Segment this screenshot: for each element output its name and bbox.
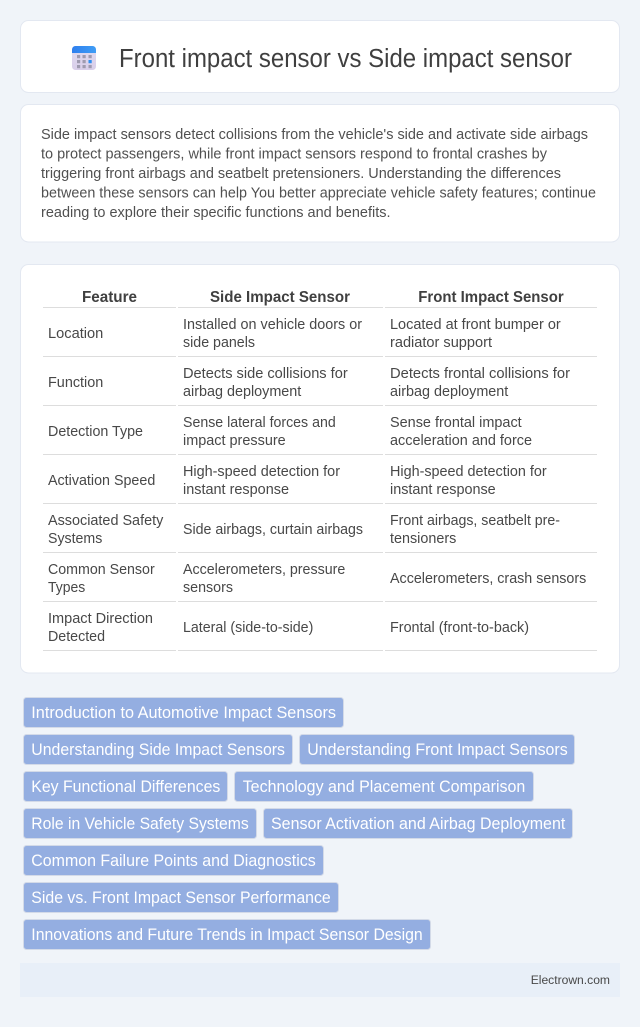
table row: Activation Speed [43, 464, 597, 504]
tag: Side vs. Front [24, 882, 338, 912]
table row: Associated Safety Systems: Associated Safety [48, 513, 164, 529]
table row: Function [43, 366, 597, 406]
table row: Location: Location [48, 326, 103, 342]
tag: Introduction: Introduction to Automotive Impact Sensors [31, 704, 336, 722]
table row: Detection Type [43, 415, 597, 455]
table row: Impact Direction Detected: Impact Direction [48, 611, 153, 627]
footer [20, 963, 620, 997]
table row: Associated Safety Systems: Systems [48, 531, 102, 547]
tag: Technology and Placement [234, 772, 534, 802]
table row: Detection Type: impact pressure [183, 433, 286, 449]
table row: Activation Speed: instant response [390, 482, 496, 498]
tag: Common Failure Points: Common Failure Points and Diagnostics [31, 852, 316, 870]
tag: Key Functional Differences: Key Functional Differences [31, 778, 220, 796]
table row: Location: side panels [183, 335, 255, 351]
table row: Associated Safety Systems: Front airbags, seatbelt pre- [390, 513, 560, 529]
panel: comparison table [20, 264, 620, 673]
table row: Common Sensor Types: sensors [183, 580, 233, 596]
table row: Impact Direction Detected: Detected [48, 629, 105, 645]
table row: Associated Safety Systems: Side airbags, curtain airbags [183, 522, 363, 538]
table row: Common Sensor Types: Common Sensor [48, 562, 155, 578]
intro paragraph [41, 127, 596, 221]
table row: Detection Type: Sense frontal impact [390, 415, 522, 431]
table row: Function: airbag deployment [390, 384, 508, 400]
table row: Function: airbag deployment [183, 384, 301, 400]
intro paragraph: triggering front airbags and seatbelt pretensioners. Understanding the differences [41, 166, 561, 182]
table row: Location: radiator support [390, 335, 492, 351]
tag: Role in Vehicle Safety [24, 808, 256, 838]
table row: Common Sensor Types: Accelerometers, crash sensors [390, 571, 586, 587]
panel: introduction [20, 104, 620, 242]
tag: Key Functional Differences [24, 772, 228, 802]
table row: Associated Safety Systems [43, 513, 597, 553]
table row: Associated Safety Systems: tensioners [390, 531, 456, 547]
tag: Understanding Side: Understanding Side Impact Sensors [31, 741, 285, 759]
intro paragraph: Side impact sensors detect collisions from the vehicle's side and activate side airbags [41, 127, 588, 143]
tag: Sensor Activation [264, 808, 572, 838]
tag: Innovations [24, 920, 430, 950]
intro paragraph: reading to explore their specific functions and benefits. [41, 205, 390, 221]
table row: Function: Detects frontal collisions for [390, 366, 570, 382]
tag: Common Failure Points [24, 846, 324, 876]
table row: Function: Function [48, 375, 103, 391]
tag: Understanding Front [300, 734, 574, 764]
footer: Electrown.com [531, 973, 610, 987]
table row: Detection Type: acceleration and force [390, 433, 532, 449]
table row: Activation Speed: High-speed detection for [183, 464, 340, 480]
table header row: Front Impact Sensor [418, 289, 564, 306]
title: Front impact sensor vs Side impact sensor [119, 45, 572, 73]
table row: Impact Direction Detected: Lateral (side-to-side) [183, 620, 313, 636]
table row: Detection Type: Sense lateral forces and [183, 415, 336, 431]
table row: Location [43, 317, 597, 357]
tag: Understanding Side [24, 734, 292, 764]
tag: Technology and Placement: Technology and Placement Comparison [243, 778, 525, 796]
table row: Common Sensor Types: Accelerometers, pressure [183, 562, 345, 578]
tag: Introduction [24, 698, 344, 728]
tag: Sensor Activation: Sensor Activation and Airbag Deployment [271, 815, 566, 833]
table row: Impact Direction Detected: Frontal (front-to-back) [390, 620, 529, 636]
icon: calendar [72, 46, 96, 70]
table header row: Feature [82, 289, 137, 306]
table row: Activation Speed: High-speed detection for [390, 464, 547, 480]
tag: Role in Vehicle Safety: Role in Vehicle Safety Systems [31, 815, 249, 833]
intro paragraph: between these sensors can help You better appreciate vehicle safety features; continue [41, 186, 596, 202]
table row: Activation Speed: instant response [183, 482, 289, 498]
table row: Location: Installed on vehicle doors or [183, 317, 362, 333]
table header row: Side Impact Sensor [210, 289, 350, 306]
table header row [43, 289, 597, 308]
tag: Side vs. Front: Side vs. Front Impact Sensor Performance [31, 889, 331, 907]
table row: Detection Type: Detection Type [48, 424, 143, 440]
table row: Common Sensor Types: Types [48, 580, 85, 596]
table row: Common Sensor Types [43, 562, 597, 602]
panel: topic tags [24, 698, 574, 950]
tag: Innovations: Innovations and Future Trends in Impact Sensor Design [31, 926, 423, 944]
table row: Impact Direction Detected [43, 611, 597, 651]
tag: Understanding Front: Understanding Front Impact Sensors [307, 741, 568, 759]
table row: Function: Detects side collisions for [183, 366, 348, 382]
table row: Location: Located at front bumper or [390, 317, 561, 333]
panel: title header [20, 20, 620, 92]
table row: Activation Speed: Activation Speed [48, 473, 155, 489]
intro paragraph: to protect passengers, while front impact sensors respond to frontal crashes by [41, 146, 548, 162]
